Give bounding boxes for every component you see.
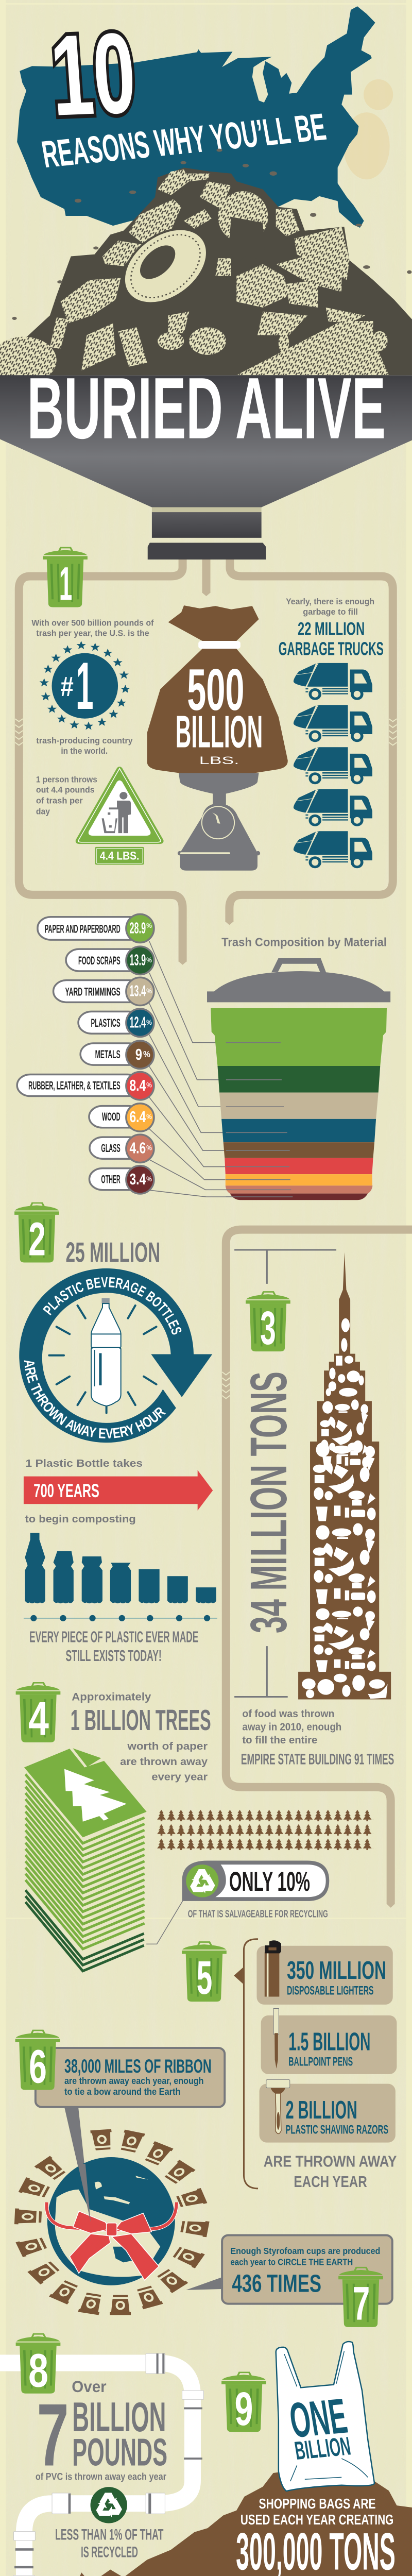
icon: trash can number 7: 7: [353, 2277, 370, 2330]
text: yearly garbage: garbage to fill: [303, 607, 358, 617]
title number 10: 10: [47, 9, 140, 140]
section: trash composition: METALS: [95, 1048, 121, 1061]
section: trash composition: YARD TRIMMINGS: [65, 985, 121, 998]
section: trash composition: WOOD: [102, 1110, 121, 1123]
text: 1 plastic bottle takes: 1 Plastic Bottle takes: [25, 1458, 143, 1469]
callout line: [146, 1901, 183, 1944]
legend percentages: 9: [135, 1045, 142, 1063]
illustration: 500 billion lbs bag: LBS.: [199, 754, 239, 767]
funnel shadow strip: [152, 507, 262, 513]
illustration: one billion shopping bag: [276, 2342, 374, 2491]
section: plastic and trees: 1 BILLION TREES: [71, 1704, 211, 1737]
icons: styrofoam cups ring: [14, 2129, 210, 2315]
connector pipes: reason 1 frame: [19, 560, 393, 962]
section: trash composition: FOOD SCRAPS: [78, 954, 121, 967]
text on ring: plastic beverage bottles: ARE THROWN AWAY EVERY HOUR: [24, 1360, 166, 1438]
legend percentages: 12.4: [130, 1013, 146, 1031]
illustration: empire state building of food: [298, 1252, 391, 1699]
landfill soil: [0, 2471, 412, 2576]
leader lines: [149, 941, 293, 1197]
text: are thrown away each year: [264, 2153, 397, 2191]
section: pvc and shopping bags: [0, 2353, 412, 2576]
section: recycling and reason 5: [15, 1860, 397, 2222]
legend pills: [17, 917, 143, 1190]
legend percentages: %: [146, 1081, 152, 1089]
funnel banner: [0, 375, 412, 507]
badge: number one with stars: #: [60, 672, 74, 702]
text: trash producing country: [36, 736, 133, 756]
icon: trash can number 3: [246, 1292, 290, 1354]
section: header: [0, 6, 412, 384]
panel: 350 million lighters: [256, 1940, 393, 2005]
legend percentages: %: [146, 956, 152, 964]
legend percentages: %: [146, 922, 152, 930]
icon: trash can number 4: 4: [28, 1692, 49, 1745]
section: soil text and reason 10: LESS THAN 1% OF THAT: [55, 2526, 164, 2543]
text: one person throws: [36, 775, 97, 817]
badge: number one with stars: 1: [76, 649, 94, 723]
icon: trash can number 1: 1: [59, 557, 72, 610]
clock ticks: [49, 1306, 157, 1413]
illustration: paper stack: [24, 1748, 147, 1971]
text: less than 1 percent: IS RECYCLED: [81, 2544, 138, 2561]
callout: only 10 percent: [182, 1860, 329, 1901]
text: food thrown away: away in 2010, enough: [242, 1721, 341, 1733]
pipe chevrons: [15, 719, 397, 745]
text: one person throws: out 4.4 pounds: [36, 785, 95, 795]
text: every piece of plastic: [29, 1628, 198, 1665]
text: shopping bags: [236, 2496, 396, 2576]
section: reason 8 and 9: [16, 2334, 374, 2491]
section: reason 1: BILLION: [176, 706, 263, 757]
section: trash composition: OTHER: [101, 1173, 121, 1186]
section: buried alive banner: [0, 360, 412, 965]
text: 1 billion trees: every year: [151, 1771, 208, 1783]
redraw of leader ends over can: [226, 1043, 293, 1197]
legend percentages: %: [146, 1175, 152, 1183]
badge: 4.4 lbs: 4.4 LBS.: [100, 849, 139, 862]
badge: number one with stars: [40, 641, 130, 730]
legend labels: [28, 922, 121, 1186]
text: 1 billion trees: [71, 1691, 211, 1783]
ring arrow: [19, 1268, 194, 1443]
icon: trash can number 3: 3: [260, 1301, 276, 1354]
icon: trash can number 2: [14, 1203, 59, 1265]
legend percentages: 8.4: [130, 1076, 146, 1094]
arrow head: [151, 1354, 212, 1397]
pointer tip over globe: [78, 2164, 91, 2222]
arrow: 700 years: [24, 1470, 213, 1511]
panel: 38000 miles of ribbon: 38,000 MILES OF RIBBON: [64, 2056, 212, 2077]
section: soil text and reason 10: [22, 2471, 396, 2576]
section: trash composition: PAPER AND PAPERBOARD: [45, 922, 121, 935]
coffee stains: [344, 79, 393, 179]
text: to begin composting: to begin composting: [25, 1513, 136, 1525]
T-bar top of building scale: [234, 1250, 336, 1284]
text: one person throws: of trash per: [36, 796, 83, 806]
legend percentages: %: [146, 1144, 152, 1152]
icon: recycle circle: [91, 2487, 127, 2523]
text: over 500 billion pounds: trash per year, the U.S. is the: [36, 629, 149, 638]
pipe arrow tip: [387, 1904, 395, 1908]
icon: trash can number 4: [16, 1683, 60, 1745]
icon: trash can number 9: 9: [235, 2382, 253, 2435]
text: over 500 billion pounds: [31, 618, 154, 638]
icon: trash can number 6: [15, 2030, 60, 2093]
badge: 4.4 lbs: [95, 847, 144, 865]
panel: 1.5 billion pens: [261, 2008, 397, 2074]
section: trash composition: [14, 914, 412, 1908]
pipe: [0, 2353, 412, 2576]
text: over 500 billion pounds: With over 500 billion pounds of: [31, 618, 154, 628]
vertical heading: 34 million tons: 34 MILLION TONS: [240, 1371, 298, 1633]
legend percentages: 4.6: [130, 1139, 146, 1157]
flies: [12, 149, 411, 320]
legend percentages: 3.4: [130, 1170, 146, 1188]
text: yearly garbage: Yearly, there is enough: [286, 597, 374, 606]
bracket: [234, 1939, 258, 2189]
text: yearly garbage: [286, 597, 374, 617]
heading: over 7 billion pounds: [37, 2378, 167, 2485]
icon: trash can number 9: [221, 2372, 266, 2435]
section: reason 2 and 3: 25 MILLION: [66, 1237, 160, 1268]
legend percentages: 28.9: [130, 919, 146, 937]
section: reason 8 and 9: POUNDS: [72, 2431, 167, 2474]
section: trash composition: RUBBER, LEATHER, & TEXTILES: [28, 1079, 121, 1092]
illustration: globe with ribbon: [47, 2157, 177, 2285]
text: trash producing country: trash-producing country: [36, 736, 133, 745]
text: less than 1 percent: [55, 2526, 164, 2561]
legend percentages: 13.4: [130, 982, 146, 999]
panel: 38000 miles of ribbon: are thrown away each year, enough: [64, 2075, 203, 2086]
text on ring: plastic beverage bottles: PLASTIC BEVERAGE BOTTLES: [43, 1277, 181, 1334]
legend percentages: [130, 919, 152, 1188]
panel: 2 billion razors: [260, 2079, 396, 2143]
legend percentages: 13.9: [130, 951, 146, 969]
icon: trash can number 7: [338, 2267, 383, 2330]
text: pvc thrown away: of PVC is thrown away each year: [36, 2471, 166, 2482]
icon: trash can number 5: 5: [197, 1951, 212, 2004]
legend percentages: %: [143, 1049, 150, 1059]
section: reason 8 and 9: BILLION: [72, 2394, 166, 2441]
text: 1 billion trees: Approximately: [72, 1691, 151, 1703]
illustration: 500 billion lbs bag: 500: [187, 657, 244, 723]
icon: warning sign with person: [76, 767, 164, 844]
text: one person throws: day: [36, 807, 50, 817]
legend percentages: %: [146, 987, 152, 995]
section: reason 2 and 3: [19, 1237, 391, 1699]
text: 1 billion trees: are thrown away: [120, 1756, 208, 1768]
icons: rows of trees: [157, 1810, 373, 1853]
text on ring: plastic beverage bottles: [24, 1277, 181, 1438]
icon: trash can number 2: 2: [28, 1212, 46, 1265]
text: 1 billion trees: worth of paper: [127, 1740, 208, 1752]
text: trash producing country: in the world.: [61, 746, 108, 756]
funnel lip: [148, 543, 266, 560]
section: trash composition: GLASS: [101, 1142, 121, 1155]
text: food thrown away: [241, 1708, 394, 1768]
icon: plastic bottle: [91, 1298, 121, 1406]
icons: garbage trucks: [294, 663, 372, 868]
text: every piece of plastic: STILL EXISTS TODAY!: [66, 1647, 162, 1665]
arrow: 700 years: 700 YEARS: [33, 1480, 99, 1501]
icon: trash can number 8: [16, 2334, 60, 2397]
icon: trash can number 5: [182, 1942, 227, 2004]
illustration: scale: [178, 773, 260, 871]
lower scale bar: [234, 1646, 288, 1697]
heading: over 7 billion pounds: 7: [37, 2385, 69, 2485]
pointer from ribbon panel to globe: [64, 2107, 91, 2222]
chart: decomposing bottles: [25, 1533, 216, 1603]
icon: trash can number 1: [43, 548, 88, 610]
icon: trash can number 8: 8: [28, 2344, 48, 2397]
panel: styrofoam cups: [186, 2235, 392, 2304]
chart: trash can stacked layers: [207, 958, 390, 1200]
pipe arrow tips: [178, 592, 234, 965]
heading: over 7 billion pounds: Over: [72, 2378, 107, 2396]
legend percentages: %: [146, 1113, 152, 1121]
section: plastic and trees: [16, 1533, 394, 1971]
legend percentages: 6.4: [130, 1108, 146, 1126]
text: food thrown away: to fill the entire: [242, 1734, 317, 1746]
illustration: 500 billion lbs bag: [147, 605, 288, 777]
legend percentage circles: [126, 914, 154, 1194]
panel: styrofoam cups: 436 TIMES: [232, 2269, 321, 2298]
illustration: trash heap: [0, 167, 412, 384]
connector pipe: reason 3 frame: [226, 1230, 412, 1904]
icon: trash can number 6: 6: [29, 2040, 47, 2093]
heading: 22 million garbage trucks: [279, 618, 384, 659]
US map silhouette: [17, 6, 375, 228]
funnel block: [152, 512, 262, 538]
panel: 38000 miles of ribbon: to tie a bow around the Earth: [64, 2086, 181, 2097]
text: one person throws: 1 person throws: [36, 775, 97, 785]
callout: only 10 percent: ONLY 10%: [229, 1867, 310, 1897]
section: ribbon globe and styrofoam: [14, 2129, 392, 2330]
pipe chevrons: [222, 1372, 230, 1399]
section: trash composition: PLASTICS: [91, 1016, 121, 1029]
legend percentages: %: [146, 1019, 152, 1026]
section: reason 1: [31, 605, 384, 871]
timeline dots: [24, 1615, 217, 1621]
panel: 38000 miles of ribbon: [36, 2048, 225, 2107]
text: food thrown away: of food was thrown: [242, 1708, 334, 1720]
